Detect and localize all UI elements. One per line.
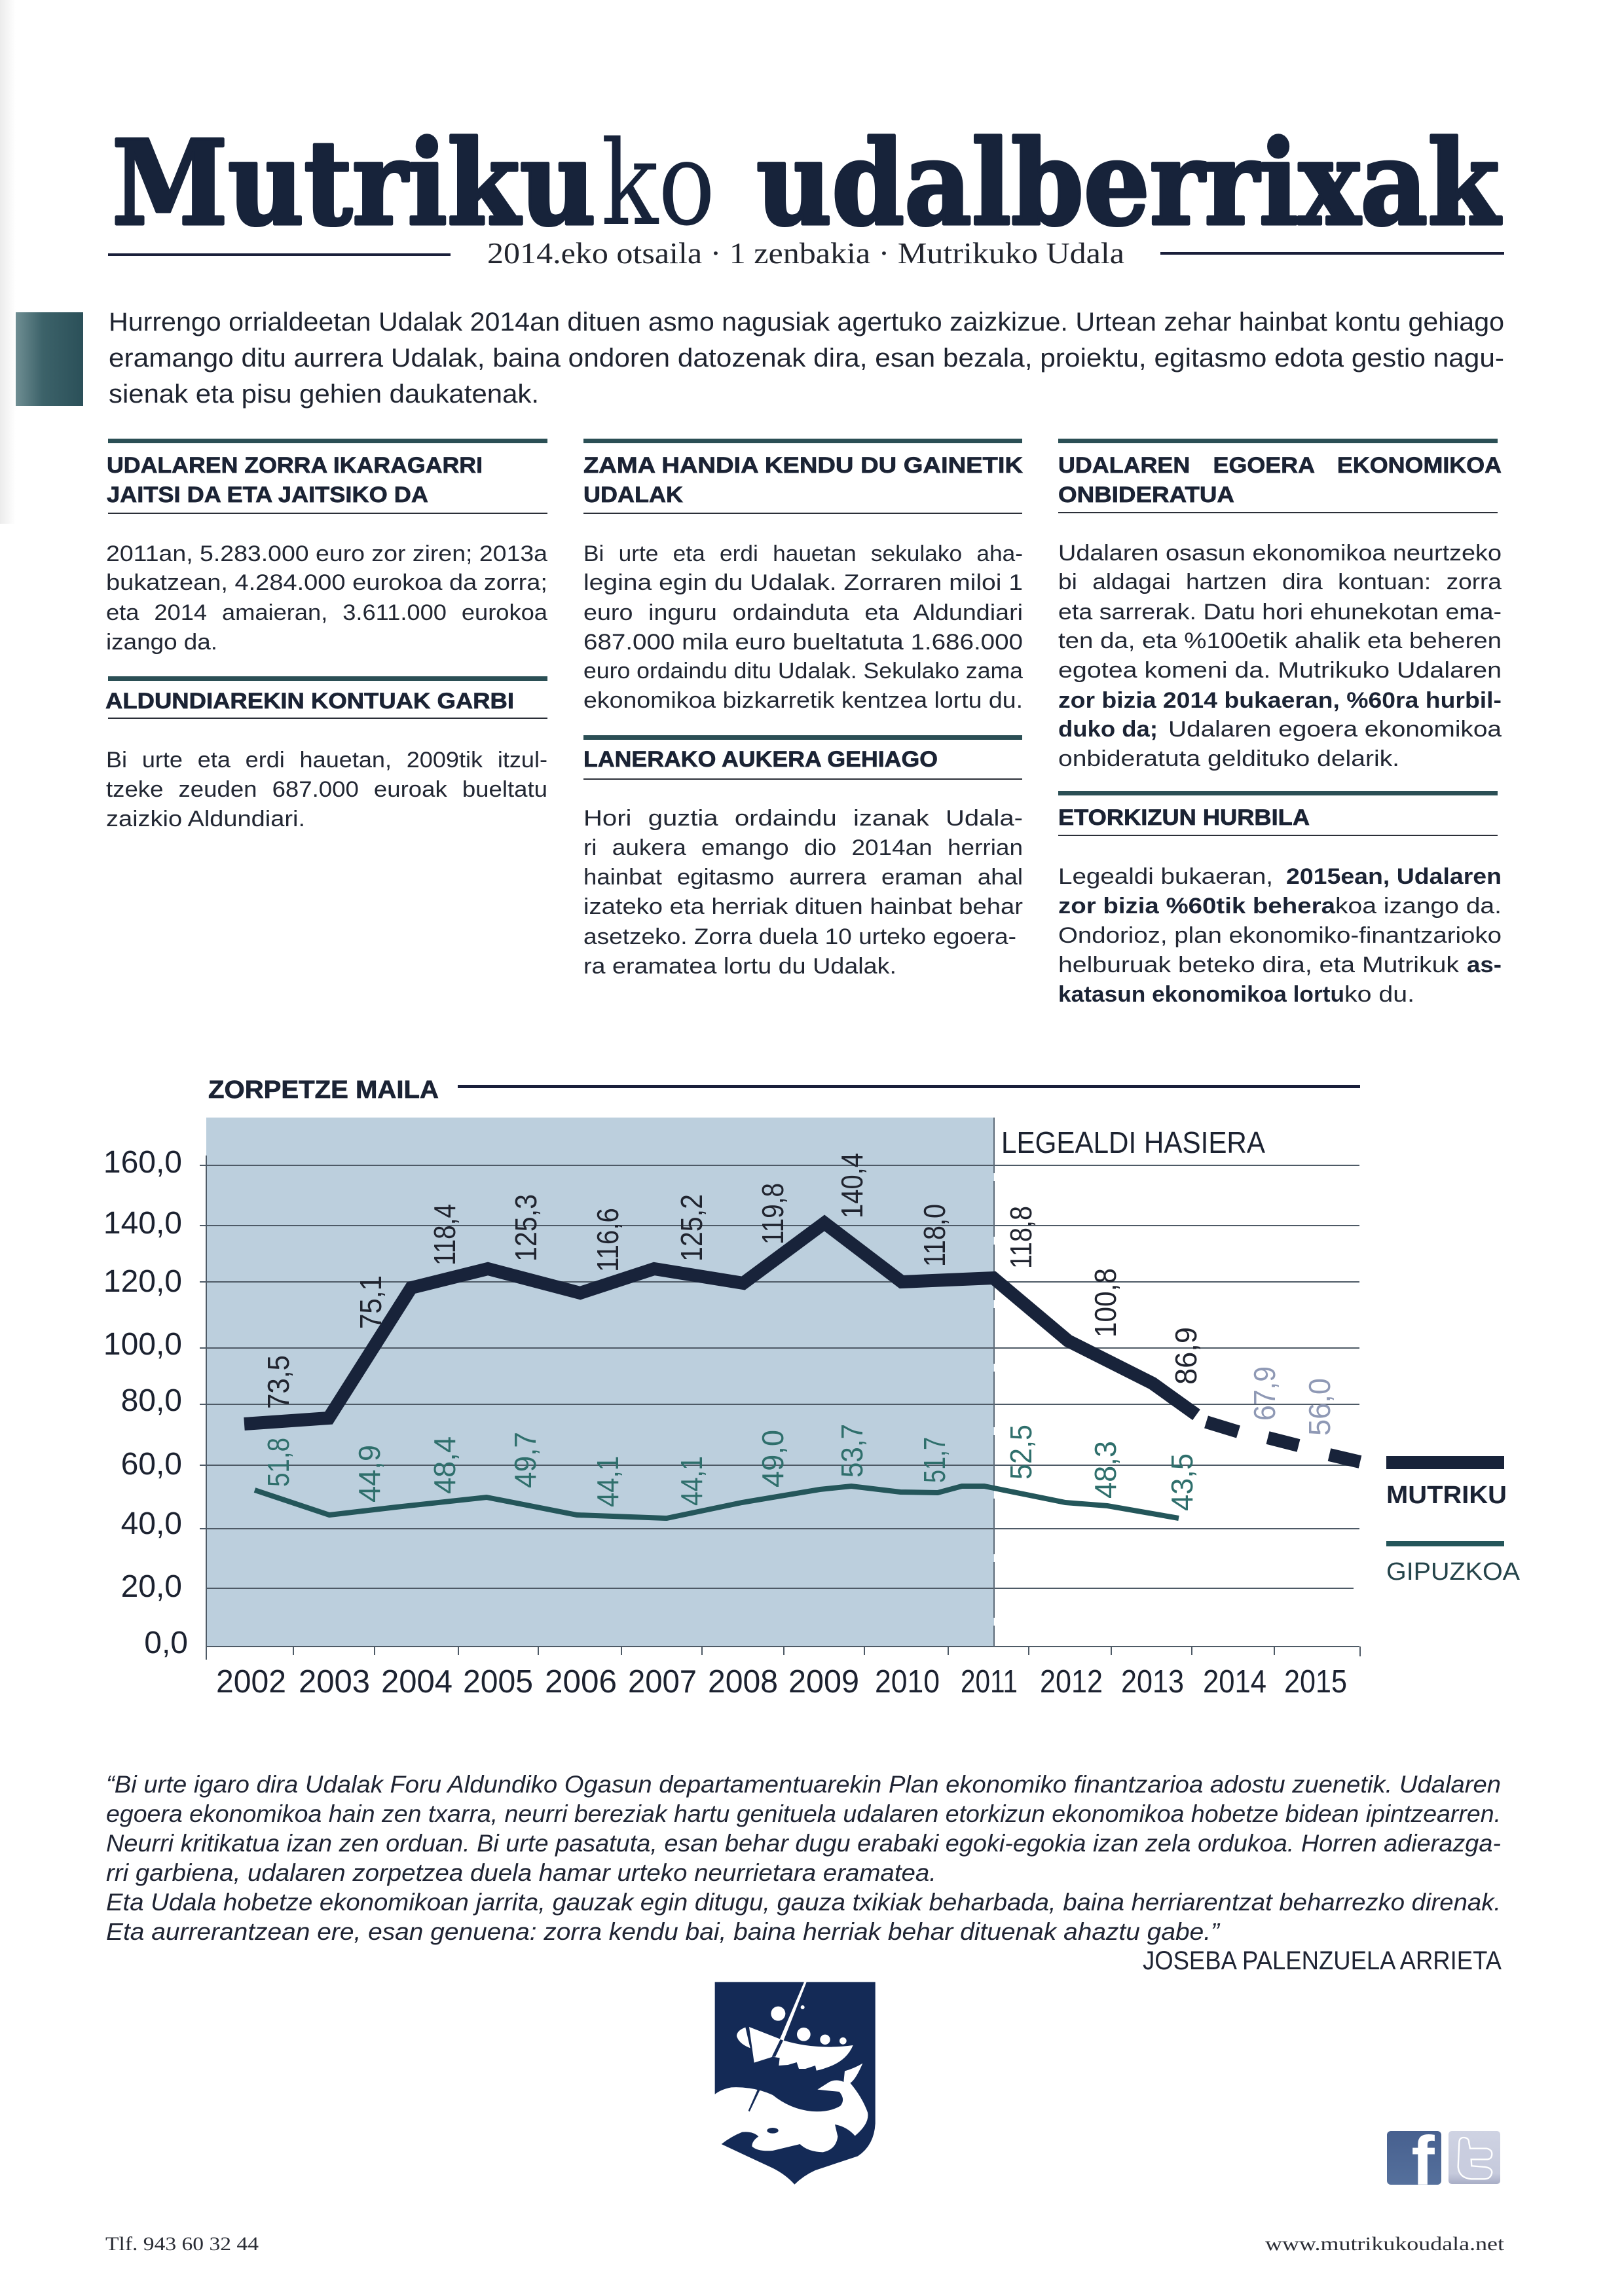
column 3	[1058, 439, 1502, 1007]
quote author: JOSEBA PALENZUELA ARRIETA	[1143, 1946, 1502, 1975]
icon: twitter	[1449, 2131, 1500, 2184]
legend: Mutriku	[1386, 1456, 1507, 1509]
x axis labels: 2005	[463, 1664, 533, 1700]
annotation: legealdi hasiera: LEGEALDI HASIERA	[1001, 1125, 1265, 1159]
legend: Gipuzkoa: GIPUZKOA	[1386, 1558, 1521, 1586]
section: aldundiarekin	[105, 676, 547, 831]
section: etorkizun hurbila: 2015ean, Udalaren	[1286, 864, 1502, 889]
section: lanerako aukera: hainbat egitasmo aurrera eraman ahal	[583, 865, 1023, 890]
intro text	[109, 308, 1504, 409]
section: egoera ekonomikoa: duko da;	[1058, 717, 1158, 742]
Mutriku value labels: 118,0	[917, 1204, 951, 1267]
section: zama handia: 687.000 mila euro bueltatuta 1.686.000	[583, 630, 1023, 655]
section: aldundiarekin: zaizkio Aldundiari.	[106, 807, 305, 831]
Mutriku value labels: 125,2	[674, 1194, 709, 1262]
Mutriku value labels: 140,4	[835, 1153, 869, 1218]
title: ko	[601, 116, 715, 251]
section: udalaren zorra: UDALAREN ZORRA IKARAGARRI	[107, 453, 483, 478]
section: lanerako aukera: ri aukera emango dio 2014an herrian	[583, 835, 1023, 860]
Mutriku value labels: 119,8	[756, 1183, 790, 1245]
section: aldundiarekin: ALDUNDIAREKIN KONTUAK GARBI	[105, 689, 514, 714]
subtitle with rules: 2014.eko otsaila · 1 zenbakia · Mutrikuko Udala	[487, 236, 1124, 270]
y axis labels: 140,0	[103, 1206, 182, 1241]
shaded period	[206, 1118, 994, 1647]
section: zama handia: legina egin du Udalak. Zorraren miloi 1	[583, 570, 1023, 595]
Gipuzkoa value labels: 48,4	[428, 1436, 462, 1494]
section: lanerako aukera: asetzeko. Zorra duela 10 urteko egoera-	[583, 924, 1016, 949]
y axis labels: 20,0	[121, 1569, 182, 1604]
side tab bar	[16, 312, 83, 406]
section: udalaren zorra: izango da.	[106, 630, 217, 655]
quote: Eta Udala hobetze ekonomikoan jarrita, gauzak egin ditugu, gauza txikiak beharbada, baina herriarentzat beharrezko direnak.	[106, 1889, 1501, 1916]
Mutriku value labels: 116,6	[591, 1208, 625, 1272]
x axis labels: 2011	[961, 1664, 1018, 1700]
section: aldundiarekin: tzeke zeuden 687.000 euroak bueltatu	[106, 777, 547, 802]
footer: website: www.mutrikukoudala.net	[1265, 2233, 1505, 2255]
series: Mutriku	[244, 1223, 1196, 1424]
quote: Eta aurrerantzean ere, esan genuena: zorra kendu bai, baina herriak behar dituenak ahaztu gabe.”	[106, 1918, 1221, 1945]
section: zama handia: ZAMA HANDIA KENDU DU GAINETIK	[583, 453, 1023, 478]
Mutriku value labels: 125,3	[509, 1194, 543, 1262]
section: etorkizun hurbila	[1058, 791, 1502, 1007]
section: egoera ekonomikoa: bi aldagai hartzen dira kontuan: zorra	[1058, 570, 1502, 594]
legend: Gipuzkoa	[1386, 1541, 1521, 1586]
y axis labels: 40,0	[121, 1506, 182, 1541]
section: egoera ekonomikoa: egotea komeni da. Mutrikuko Udalaren	[1058, 658, 1502, 683]
x axis labels: 2013	[1121, 1664, 1184, 1700]
legislature divider	[993, 1118, 995, 1647]
y axis labels: 100,0	[103, 1327, 182, 1362]
section: udalaren zorra	[106, 439, 547, 655]
Mutriku value labels	[261, 1153, 1337, 1436]
legend: Mutriku: MUTRIKU	[1386, 1482, 1507, 1509]
quote: egoera ekonomikoa hain zen txarra, neurri bereziak hartu genituela udalaren etorkizun ekonomikoa hobetze bidean ipintzearren.	[106, 1800, 1501, 1827]
y axis labels	[103, 1145, 188, 1660]
Gipuzkoa value labels: 53,7	[835, 1424, 869, 1478]
section: egoera ekonomikoa	[1058, 439, 1502, 771]
subtitle with rules	[108, 236, 1504, 270]
section: egoera ekonomikoa: Udalaren egoera ekonomikoa	[1168, 717, 1502, 742]
section: egoera ekonomikoa: ten da, eta %100etik ahalik eta beheren	[1058, 629, 1502, 653]
Mutriku value labels: 118,4	[428, 1204, 462, 1266]
x axis labels: 2012	[1040, 1664, 1103, 1700]
quote: Neurri kritikatua izan zen orduan. Bi urte pasatuta, esan behar dugu erabaki egoki-egokia izan zela ordukoa. Horren adierazga-	[106, 1830, 1501, 1857]
section: etorkizun hurbila: helburuak beteko dira, eta Mutrikuk	[1058, 953, 1460, 977]
section: zama handia: UDALAK	[583, 483, 683, 507]
line chart: zorpetze maila	[103, 1118, 1360, 1700]
section: zama handia	[583, 439, 1023, 713]
x axis labels: 2004	[381, 1664, 452, 1700]
Gipuzkoa value labels	[261, 1424, 1199, 1511]
title: Mutriku	[112, 115, 596, 251]
x axis labels	[216, 1664, 1347, 1700]
intro text: eramango ditu aurrera Udalak, baina ondoren datozenak dira, esan bezala, proiektu, egitasmo edota gestio nagu-	[109, 344, 1504, 373]
section: zama handia: ekonomikoa bizkarretik kentzea lortu du.	[583, 688, 1023, 713]
section: etorkizun hurbila: ko du.	[1344, 982, 1414, 1007]
section: etorkizun hurbila: Ondorioz, plan ekonomiko-finantzarioko	[1058, 923, 1502, 948]
section: lanerako aukera: Hori guztia ordaindu izanak Udala-	[583, 806, 1023, 831]
section: udalaren zorra: JAITSI DA ETA JAITSIKO DA	[107, 483, 428, 507]
Gipuzkoa value labels: 51,8	[261, 1438, 295, 1487]
Gipuzkoa value labels: 49,7	[508, 1432, 542, 1488]
x axis labels: 2015	[1284, 1664, 1347, 1700]
intro text: sienak eta pisu gehien daukatenak.	[109, 380, 539, 409]
section: etorkizun hurbila: Legealdi bukaeran,	[1058, 864, 1273, 889]
footer: phone: Tlf. 943 60 32 44	[105, 2233, 259, 2255]
x axis labels: 2002	[216, 1664, 286, 1700]
section: egoera ekonomikoa: zor bizia 2014 bukaeran, %60ra hurbil-	[1058, 688, 1502, 713]
section: etorkizun hurbila: ETORKIZUN HURBILA	[1058, 805, 1310, 830]
y axis labels: 160,0	[103, 1145, 182, 1180]
section: egoera ekonomikoa: eta sarrerak. Datu hori ehunekotan ema-	[1058, 600, 1502, 625]
section: lanerako aukera	[583, 735, 1023, 979]
section: egoera ekonomikoa: onbideratuta geldituko delarik.	[1058, 746, 1399, 771]
series: Mutriku projection	[1206, 1422, 1360, 1462]
section: lanerako aukera: ra eramatea lortu du Udalak.	[583, 954, 896, 979]
y axis labels: 120,0	[103, 1264, 182, 1299]
y axis labels: 60,0	[121, 1447, 182, 1482]
x axis labels: 2008	[708, 1664, 778, 1700]
section: egoera ekonomikoa: UDALAREN EGOERA EKONOMIKOA	[1058, 453, 1502, 478]
y axis labels: 80,0	[121, 1383, 182, 1418]
Gipuzkoa value labels: 48,3	[1088, 1441, 1122, 1499]
icon: facebook: f	[1411, 2123, 1435, 2200]
Mutriku value labels: 100,8	[1088, 1268, 1122, 1338]
section: lanerako aukera: izateko eta herriak dituen hainbat behar	[583, 894, 1023, 919]
quote: rri garbiena, udalaren zorpetzea duela hamar urteko neurrietara eramatea.	[106, 1859, 936, 1886]
column 2	[583, 439, 1023, 979]
section: etorkizun hurbila: zor bizia %60tik behera	[1058, 894, 1336, 919]
column 1	[105, 439, 547, 831]
section: lanerako aukera: LANERAKO AUKERA GEHIAGO	[583, 747, 938, 772]
icon: facebook	[1387, 2123, 1441, 2200]
legend	[1386, 1456, 1521, 1586]
section: zama handia: Bi urte eta erdi hauetan sekulako aha-	[583, 541, 1023, 566]
x axis labels: 2003	[299, 1664, 370, 1700]
section: egoera ekonomikoa: ONBIDERATUA	[1058, 483, 1234, 507]
section: aldundiarekin: Bi urte eta erdi hauetan, 2009tik itzul-	[106, 748, 547, 773]
section: zama handia: euro inguru ordainduta eta Aldundiari	[583, 600, 1023, 625]
intro text: Hurrengo orrialdeetan Udalak 2014an dituen asmo nagusiak agertuko zaizkizue. Urtean zehar hainbat kontu gehiago	[109, 308, 1504, 337]
y axis labels: 0,0	[144, 1626, 188, 1660]
Gipuzkoa value labels: 44,1	[591, 1456, 625, 1507]
section: etorkizun hurbila: as-	[1467, 953, 1502, 977]
icon: municipal coat of arms	[715, 1982, 876, 2185]
Mutriku value labels: 75,1	[354, 1275, 388, 1329]
chart heading	[208, 1076, 1360, 1104]
quote: “Bi urte igaro dira Udalak Foru Aldundiko Ogasun departamentuarekin Plan ekonomiko finantzarioa adostu zuenetik. Udalaren	[106, 1771, 1501, 1798]
Gipuzkoa value labels: 44,1	[674, 1456, 709, 1506]
title	[112, 115, 1502, 251]
chart heading: ZORPETZE MAILA	[208, 1076, 439, 1104]
Gipuzkoa value labels: 44,9	[352, 1445, 386, 1503]
section: udalaren zorra: 2011an, 5.283.000 euro zor ziren; 2013a	[106, 541, 547, 566]
quote	[106, 1771, 1501, 1945]
Mutriku value labels: 118,8	[1004, 1206, 1038, 1269]
x axis labels: 2006	[545, 1664, 617, 1700]
x axis labels: 2014	[1203, 1664, 1266, 1700]
section: zama handia: euro ordaindu ditu Udalak. Sekulako zama	[583, 659, 1023, 683]
x axis labels: 2010	[875, 1664, 940, 1700]
Mutriku value labels: 56,0	[1302, 1378, 1337, 1436]
Gipuzkoa value labels: 52,5	[1004, 1425, 1038, 1480]
section: etorkizun hurbila: katasun ekonomikoa lortu	[1058, 982, 1344, 1007]
series: Gipuzkoa	[255, 1486, 1179, 1518]
x axis labels: 2009	[788, 1664, 859, 1700]
Mutriku value labels: 67,9	[1247, 1366, 1282, 1421]
title: udalberrixak	[756, 115, 1502, 251]
section: etorkizun hurbila: koa izango da.	[1335, 894, 1502, 919]
Mutriku value labels: 73,5	[261, 1355, 295, 1409]
Gipuzkoa value labels: 43,5	[1165, 1453, 1199, 1511]
section: egoera ekonomikoa: Udalaren osasun ekonomikoa neurtzeko	[1058, 541, 1502, 566]
Gipuzkoa value labels: 51,7	[917, 1437, 951, 1483]
Gipuzkoa value labels: 49,0	[756, 1430, 790, 1487]
Mutriku value labels: 86,9	[1169, 1327, 1203, 1385]
section: udalaren zorra: bukatzean, 4.284.000 eurokoa da zorra;	[106, 570, 547, 595]
section: udalaren zorra: eta 2014 amaieran, 3.611.000 eurokoa	[106, 600, 547, 625]
grid lines	[200, 1156, 1359, 1660]
x axis labels: 2007	[628, 1664, 697, 1700]
x axis ticks	[293, 1647, 1360, 1656]
